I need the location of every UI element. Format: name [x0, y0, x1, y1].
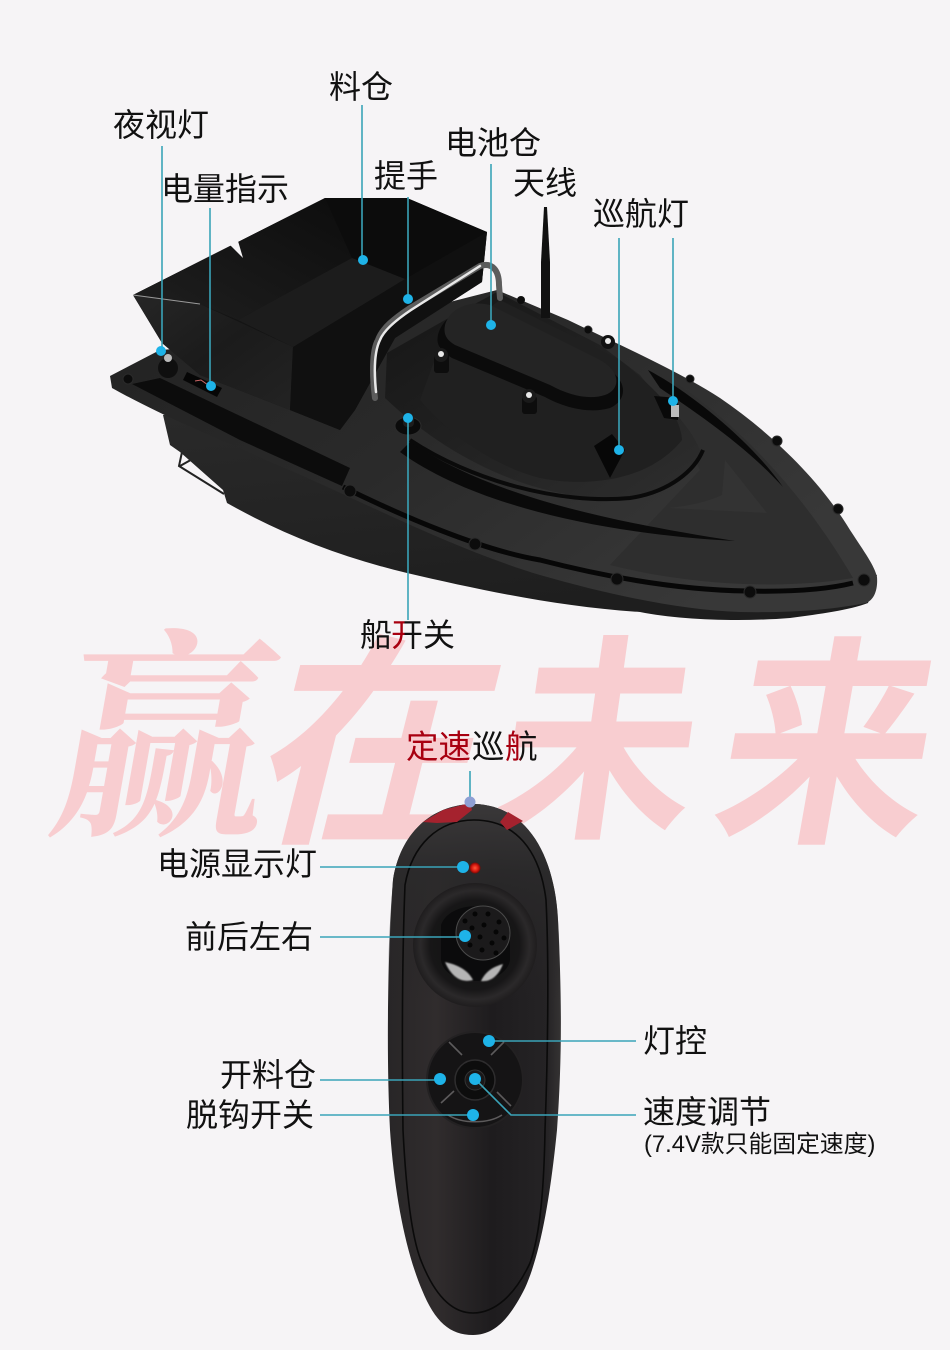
battery hatch rim [438, 308, 623, 410]
deck long groove [400, 442, 735, 541]
power LED [470, 862, 480, 874]
rear wire bracket [179, 452, 224, 494]
hopper floor [238, 258, 405, 347]
deck [110, 290, 877, 612]
boat labels: 天线 [513, 165, 577, 201]
watermark text [34, 563, 950, 890]
battery indicator [183, 372, 222, 397]
remote labels: 电源显示灯 [157, 846, 317, 882]
hull lower body [163, 400, 877, 620]
remote labels: 脱钩开关 [186, 1097, 314, 1133]
boat labels: 电池仓 [445, 125, 541, 161]
night light post [158, 354, 178, 378]
hopper outer left face [133, 295, 293, 410]
hopper base [133, 198, 487, 430]
boat labels: 料仓 [329, 69, 393, 105]
speed note: (7.4V款只能固定速度) [644, 1131, 875, 1158]
side cruise light [654, 396, 679, 420]
handle [373, 265, 500, 398]
hatch knobs [434, 296, 615, 414]
remote body [388, 804, 561, 1335]
remote labels [157, 846, 771, 1133]
cruise label [406, 729, 538, 765]
cruise label: 航 [505, 729, 538, 765]
joystick well [413, 883, 537, 1007]
cabin base ring [410, 440, 703, 499]
cabin [385, 292, 700, 498]
front cruise light [594, 434, 625, 478]
boat labels: 夜视灯 [113, 107, 209, 143]
remote labels: 速度调节 [643, 1094, 771, 1130]
remote top highlight [388, 804, 560, 1000]
cruise label: 定速 [406, 729, 471, 765]
power switch [395, 405, 421, 435]
remote seam line [402, 820, 548, 1313]
antenna [541, 207, 550, 318]
callout dots [156, 255, 678, 1121]
bow raised panel [610, 368, 853, 584]
bow triangle relief [668, 460, 767, 513]
battery hatch cover [444, 304, 616, 397]
remote labels: 前后左右 [185, 919, 313, 955]
hopper rim highlight [133, 295, 200, 304]
boat labels: 提手 [374, 158, 438, 194]
hopper outer right face [290, 232, 487, 430]
rear black channel [132, 378, 350, 486]
bow long groove [648, 370, 783, 487]
boat labels: 开 [391, 617, 423, 653]
direction pad [427, 1032, 523, 1128]
joystick head [456, 906, 510, 960]
boat labels: 关 [423, 617, 455, 653]
hopper inner right wall [325, 198, 487, 279]
remote labels: 开料仓 [220, 1057, 316, 1093]
cabin dome [420, 300, 682, 482]
boat labels: 电量指示 [161, 171, 289, 207]
boat labels: 巡航灯 [593, 196, 689, 232]
boat labels: 船 [360, 617, 392, 653]
rim screws [123, 326, 870, 598]
cruise label: 巡 [472, 729, 505, 765]
red watermark overlap [423, 803, 523, 830]
remote labels: 灯控 [643, 1023, 707, 1059]
hull side groove [343, 487, 853, 591]
remote control [388, 803, 561, 1335]
watermark text: 未 [483, 568, 724, 884]
hopper notch [230, 241, 243, 258]
hopper inner left wall [133, 198, 352, 320]
watermark text: 赢 [34, 563, 305, 882]
callout lines [162, 105, 673, 1115]
boat illustration [110, 198, 877, 620]
watermark text: 在 [232, 564, 538, 890]
boat labels [113, 69, 689, 653]
